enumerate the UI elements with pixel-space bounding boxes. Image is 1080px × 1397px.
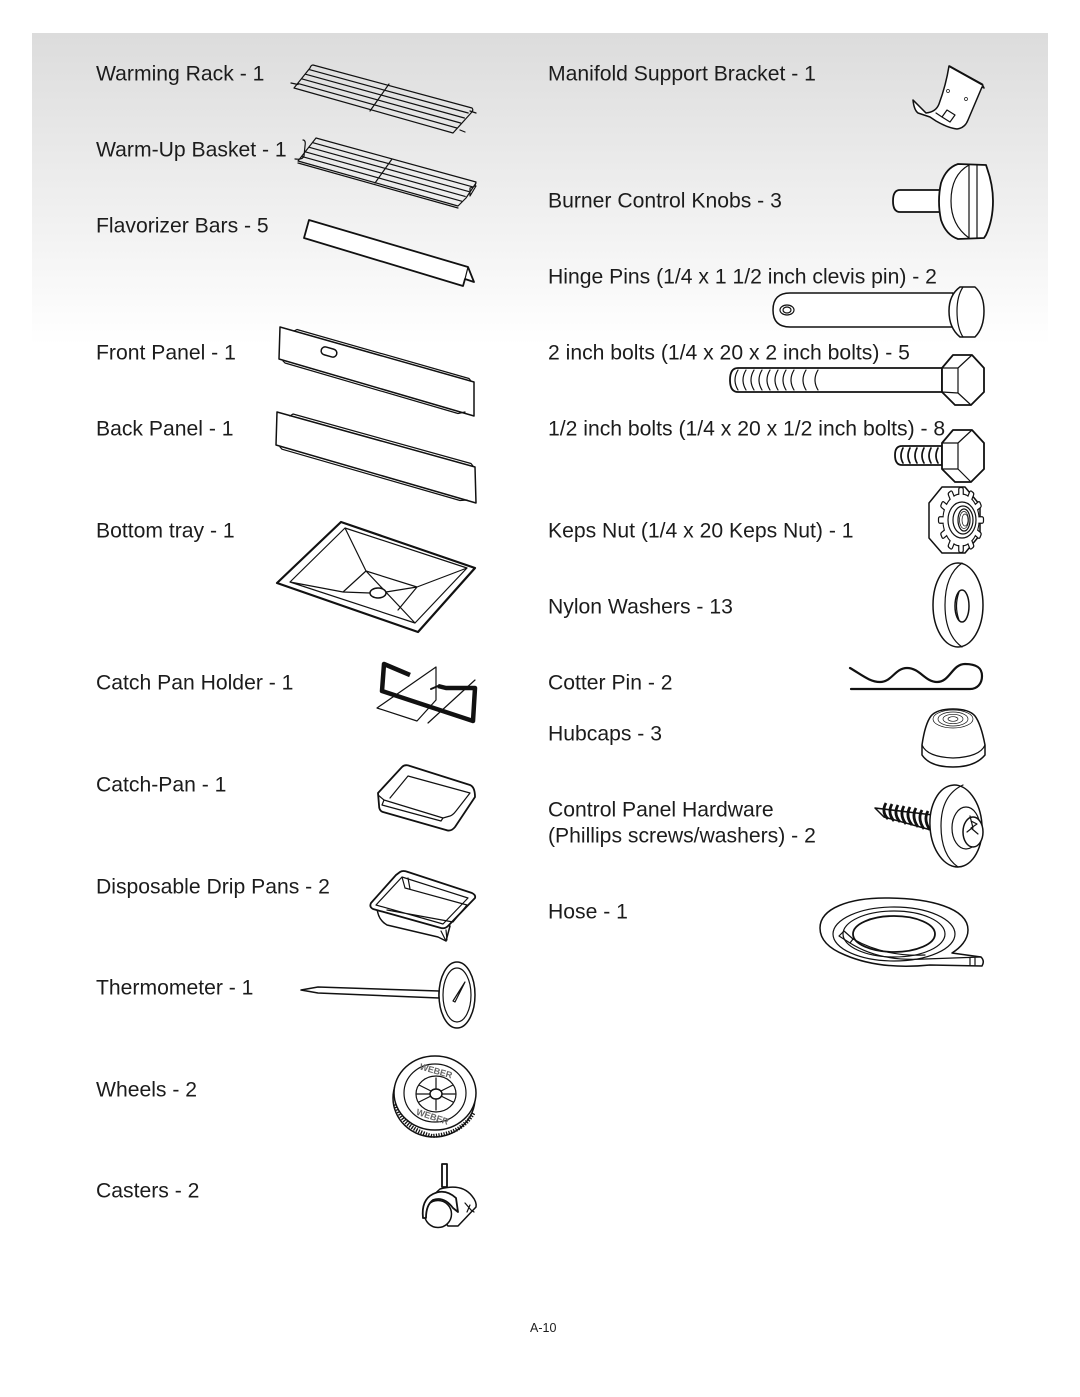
label: catch pan holder: Catch Pan Holder - 1 xyxy=(96,672,293,694)
label: half inch bolts: 1/2 inch bolts (1/4 x 20 x 1/2 inch bolts) - 8 xyxy=(548,418,945,440)
part: thermometer xyxy=(96,962,475,1028)
icon: cotter pin xyxy=(850,664,982,689)
part: hinge pins xyxy=(548,266,984,337)
label: control panel hardware: Control Panel Hardware xyxy=(548,798,774,822)
part: hose xyxy=(548,898,983,966)
part: back panel xyxy=(96,412,476,503)
icon: phillips screw with washer xyxy=(875,783,985,869)
label: thermometer: Thermometer - 1 xyxy=(96,976,253,1000)
icon: half inch bolt xyxy=(895,430,984,482)
part: half inch bolts xyxy=(548,418,984,482)
part: control panel hardware xyxy=(548,783,985,869)
icon: warming rack xyxy=(291,65,476,133)
label: catch-pan: Catch-Pan - 1 xyxy=(96,774,226,796)
label: hose: Hose - 1 xyxy=(548,900,628,924)
icon: back panel xyxy=(276,412,476,503)
label: keps nut: Keps Nut (1/4 x 20 Keps Nut) - 1 xyxy=(548,520,854,542)
icon: manifold support bracket xyxy=(913,66,984,129)
icon: flavorizer bar xyxy=(304,220,474,286)
icon: 2 inch bolt xyxy=(730,355,984,405)
label: hubcaps: Hubcaps - 3 xyxy=(548,722,662,746)
part: flavorizer bars xyxy=(96,214,474,286)
part: catch-pan xyxy=(96,765,475,831)
label: disposable drip pans: Disposable Drip Pans - 2 xyxy=(96,876,330,898)
icon: warm-up basket xyxy=(295,138,476,208)
part: nylon washers xyxy=(548,563,983,647)
label: warming rack: Warming Rack - 1 xyxy=(96,62,264,86)
icon: thermometer xyxy=(301,962,475,1028)
icon: hubcap xyxy=(922,709,985,767)
part: warming rack xyxy=(96,62,476,133)
part: 2 inch bolts xyxy=(548,342,984,405)
label: nylon washers: Nylon Washers - 13 xyxy=(548,596,733,618)
icon: nylon washer xyxy=(933,563,983,647)
label: phillips screws and washers: (Phillips screws/washers) - 2 xyxy=(548,824,816,848)
label: back panel: Back Panel - 1 xyxy=(96,418,234,440)
part: front panel xyxy=(96,327,474,416)
label: warm-up basket: Warm-Up Basket - 1 xyxy=(96,138,287,162)
icon: wheel xyxy=(393,1056,476,1137)
label: casters: Casters - 2 xyxy=(96,1180,199,1202)
part: catch pan holder xyxy=(96,664,475,723)
part: wheels xyxy=(96,1056,476,1137)
part: cotter pin xyxy=(548,664,982,694)
label: flavorizer bars: Flavorizer Bars - 5 xyxy=(96,214,269,238)
part: warm-up basket xyxy=(96,138,476,208)
icon: front panel xyxy=(279,327,474,416)
icon: bottom tray xyxy=(277,522,475,632)
label: manifold support bracket: Manifold Support Bracket - 1 xyxy=(548,62,816,86)
icon: wheel: WEBER xyxy=(415,1107,450,1127)
label: burner control knobs: Burner Control Knobs - 3 xyxy=(548,190,782,212)
label: hinge pins: Hinge Pins (1/4 x 1 1/2 inch clevis pin) - 2 xyxy=(548,266,937,288)
icon: control knob xyxy=(893,164,993,239)
icon: catch pan holder xyxy=(377,664,475,723)
icon: catch-pan xyxy=(378,765,475,831)
label: 2 inch bolts: 2 inch bolts (1/4 x 20 x 2 inch bolts) - 5 xyxy=(548,342,910,364)
part: keps nut xyxy=(548,487,984,553)
part: bottom tray xyxy=(96,520,475,632)
panel: gradient header background xyxy=(32,33,1048,345)
part: hubcaps xyxy=(548,709,985,767)
icon: keps nut xyxy=(929,487,984,553)
label: front panel: Front Panel - 1 xyxy=(96,342,236,364)
icon: drip pan xyxy=(370,871,475,941)
icon: clevis pin xyxy=(773,287,984,337)
label: cotter pin: Cotter Pin - 2 xyxy=(548,672,673,694)
icon: wheel: WEBER xyxy=(419,1062,454,1081)
icon: caster xyxy=(423,1164,476,1228)
label: bottom tray: Bottom tray - 1 xyxy=(96,520,235,542)
part: casters xyxy=(96,1164,476,1228)
label: wheels: Wheels - 2 xyxy=(96,1078,197,1102)
part: burner control knobs xyxy=(548,164,993,239)
part: manifold support bracket xyxy=(548,62,984,129)
page number: A-10 xyxy=(530,1321,556,1335)
icon: coiled hose xyxy=(820,898,983,966)
part: disposable drip pans xyxy=(96,871,475,941)
